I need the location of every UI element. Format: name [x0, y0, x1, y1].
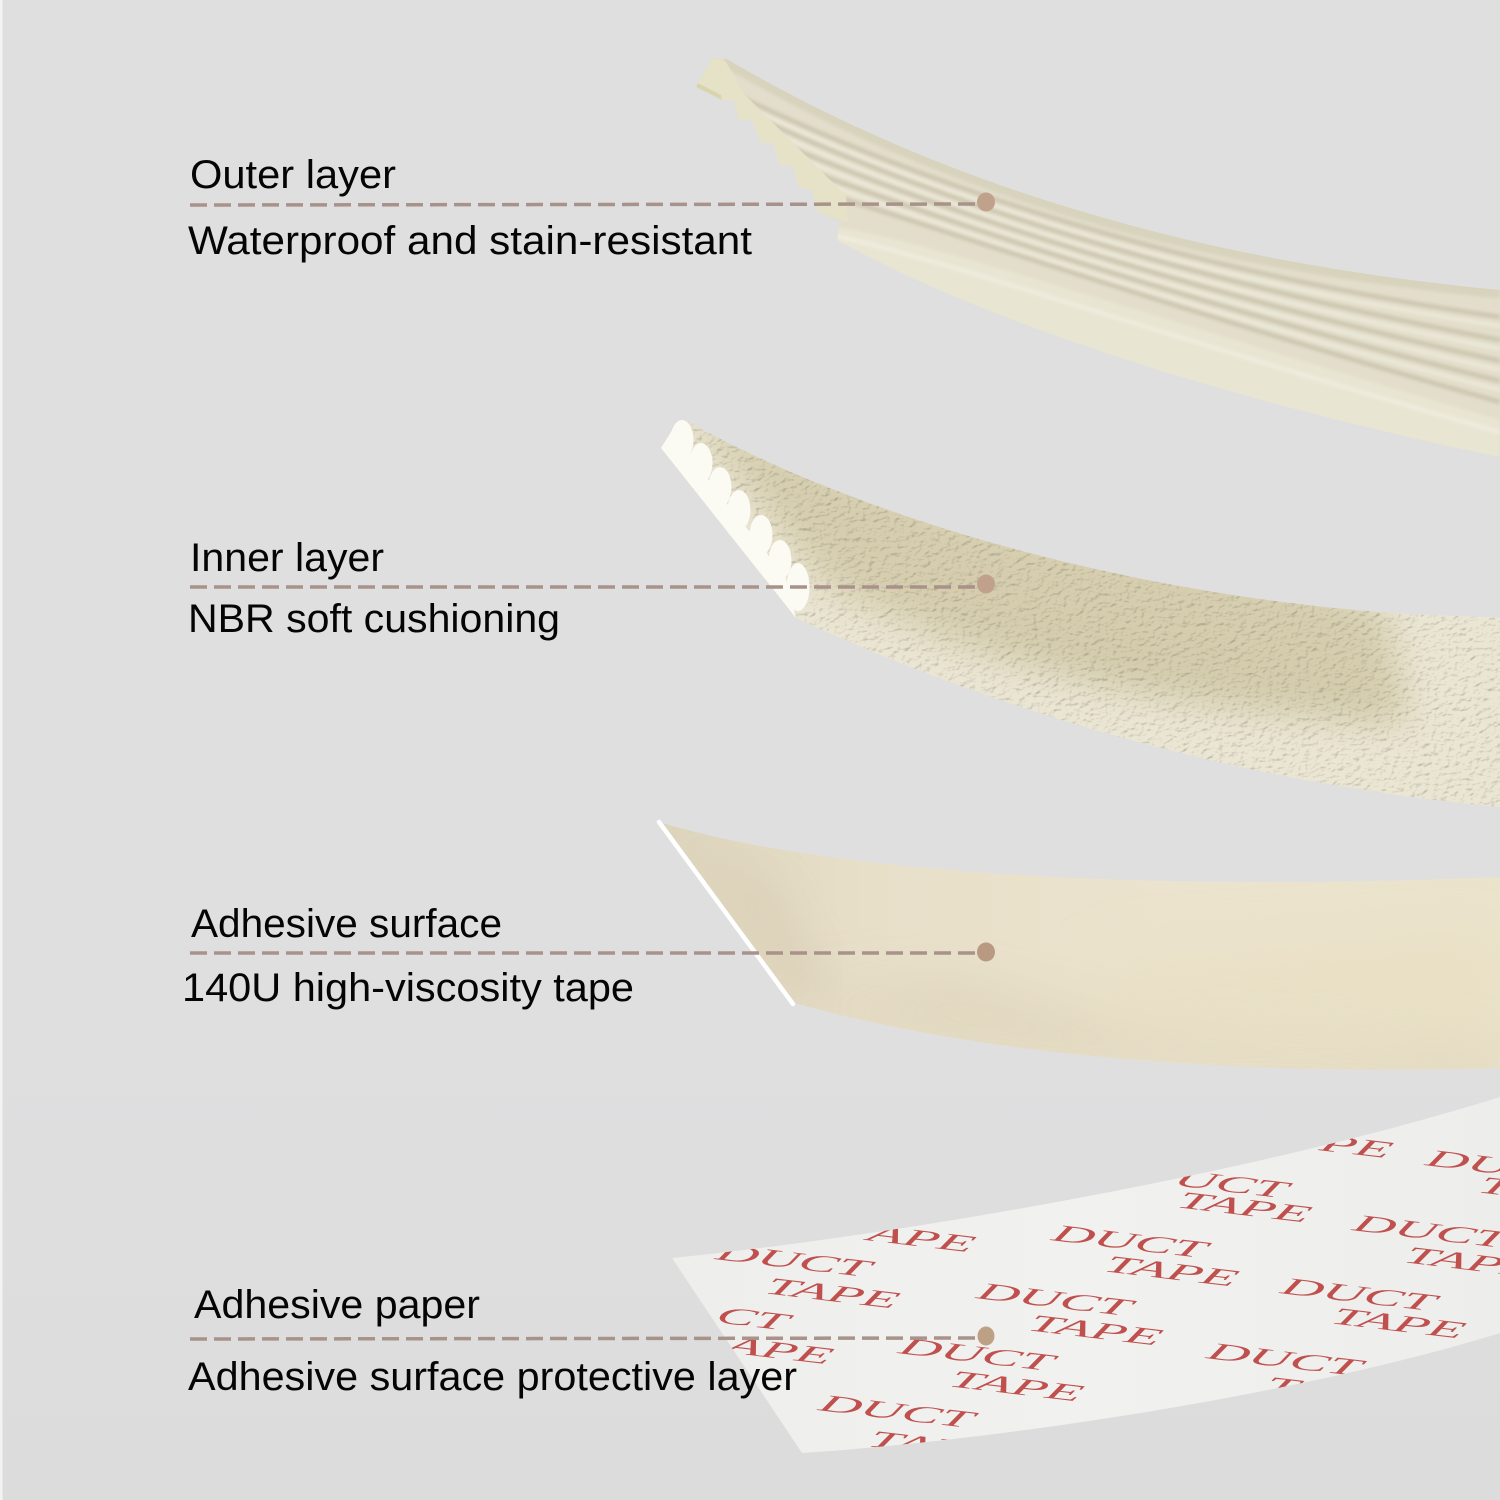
dot: adhesive paper: [978, 1326, 994, 1346]
repeated DUCT TAPE print: TAPE: [1023, 1310, 1167, 1351]
repeated DUCT TAPE print: APE: [718, 1331, 838, 1370]
repeated DUCT TAPE print: CT: [711, 1302, 798, 1336]
dot: adhesive surface: [977, 942, 995, 962]
heading: outer layer: Outer layer: [190, 153, 396, 197]
tape layer: inner textured NBR foam: [650, 405, 1500, 820]
heading: inner layer: Inner layer: [190, 536, 384, 580]
heading: adhesive paper: Adhesive paper: [194, 1283, 480, 1327]
description: adhesive surface: 140U high-viscosity tape: [182, 966, 634, 1010]
repeated DUCT TAPE print: DUCT: [1046, 1220, 1216, 1264]
tape layer: printed adhesive paper: [660, 1090, 1500, 1467]
description: outer layer: Waterproof and stain-resistant: [188, 219, 752, 263]
repeated DUCT TAPE print: TAPE: [1099, 1251, 1243, 1292]
repeated DUCT TAPE print: APE: [860, 1219, 980, 1258]
repeated DUCT TAPE print: DUCT: [971, 1278, 1141, 1322]
heading: adhesive surface: Adhesive surface: [191, 902, 502, 946]
repeated DUCT TAPE print: TAPE: [1259, 1372, 1403, 1413]
callout: inner layer: [188, 536, 995, 641]
dot: inner layer: [977, 574, 995, 594]
white cut edge: [659, 822, 793, 1004]
white cut scallops: [661, 420, 810, 618]
repeated DUCT TAPE print: TAPE: [1326, 1303, 1470, 1344]
repeated DUCT TAPE print: PE: [1314, 1130, 1397, 1163]
repeated DUCT TAPE print: DUCT: [1201, 1338, 1371, 1382]
leader line: outer layer: [190, 204, 978, 205]
cut step tabs: [720, 62, 846, 202]
description: adhesive paper: Adhesive surface protective layer: [188, 1355, 797, 1399]
repeated DUCT TAPE print: TAPE: [944, 1366, 1088, 1407]
repeated DUCT TAPE print: TAPE: [1172, 1187, 1316, 1228]
callout: outer layer: [188, 153, 995, 263]
repeated DUCT TAPE print: DUCT: [813, 1390, 983, 1434]
callout: adhesive surface: [182, 902, 995, 1010]
foam texture: [650, 410, 1500, 820]
repeated DUCT TAPE print: DUCT: [893, 1333, 1063, 1377]
callout: adhesive paper: [188, 1283, 994, 1399]
lip: [825, 226, 1500, 470]
leader line: adhesive surface: [190, 951, 978, 955]
leader line: adhesive paper: [190, 1338, 978, 1339]
tape layer: smooth adhesive surface: [650, 815, 1500, 1085]
repeated DUCT TAPE print: DUCT: [1275, 1273, 1445, 1317]
repeated DUCT TAPE print: TAPE: [760, 1273, 904, 1314]
tape layer: outer ribbed strip: [680, 40, 1500, 470]
repeated DUCT TAPE print: TAPE: [863, 1426, 1007, 1467]
description: inner layer: NBR soft cushioning: [188, 597, 560, 641]
repeated DUCT TAPE print: [710, 1130, 1500, 1467]
rib shading: [725, 60, 1500, 292]
dot: outer layer: [977, 192, 995, 212]
tan upper zone: [680, 405, 1410, 725]
repeated DUCT TAPE print: DUCT: [710, 1239, 880, 1283]
repeated DUCT TAPE print: UCT: [1169, 1165, 1297, 1204]
leader line: inner layer: [190, 585, 978, 589]
